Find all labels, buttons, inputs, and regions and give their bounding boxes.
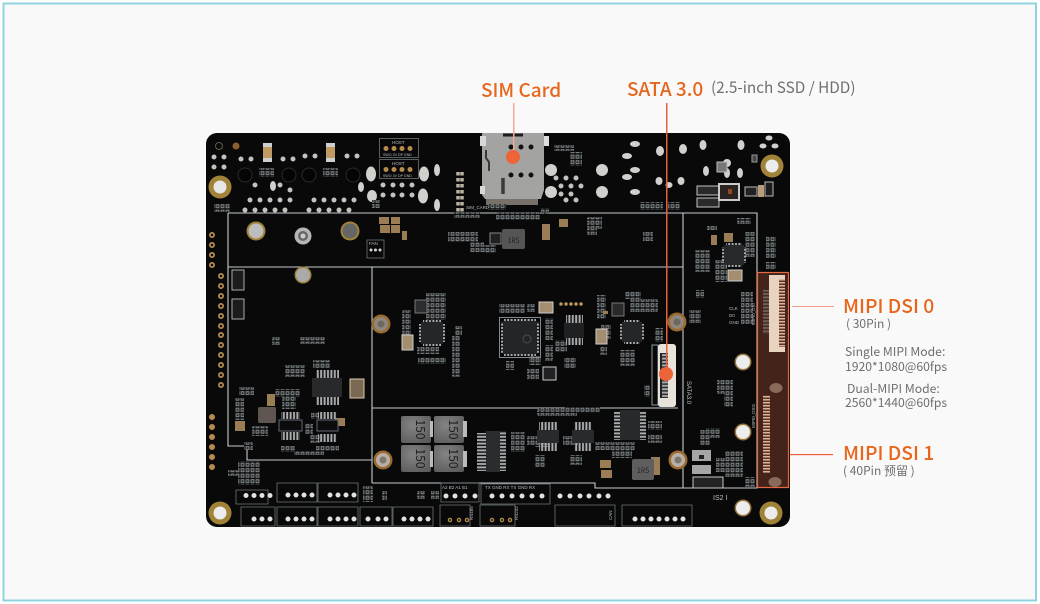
inductors: 150	[412, 449, 429, 469]
gold edge pads	[212, 235, 221, 467]
callout: SATA 3.0	[627, 75, 856, 381]
SIM card slot	[480, 133, 549, 205]
bottom header labels: A2 B2 A1 B1	[442, 485, 468, 490]
panel: circuit board: GND	[729, 320, 740, 325]
diodes	[232, 270, 244, 290]
panel: circuit board: MIPI0_DSI1	[751, 403, 756, 428]
text block: display modes: Dual-MIPI Mode:	[847, 379, 940, 397]
callout: SIM Card	[481, 76, 561, 164]
silkscreen outlines	[228, 213, 757, 488]
panel: circuit board: MIPI0_DSI	[751, 303, 756, 325]
panel: circuit board: IS2 I	[713, 495, 727, 502]
callout: MIPI DSI 0: ( 30Pin )	[846, 315, 891, 332]
FAN label: FAN	[369, 241, 378, 246]
inductors: 1R5	[637, 466, 649, 476]
QFN right	[622, 322, 642, 342]
inductors: 150	[445, 420, 462, 440]
MIPI connector 1	[763, 383, 782, 487]
SOP 8	[564, 323, 584, 338]
inductors: 150	[412, 420, 429, 440]
crystals	[402, 335, 413, 350]
silkscreen signal labels: SATA3.0	[685, 381, 691, 405]
silver through-hole pads	[214, 156, 581, 210]
callout: MIPI DSI 0	[792, 291, 934, 332]
cream SMD parts	[235, 217, 733, 478]
bottom header labels: CAN	[608, 510, 613, 520]
small square chips	[415, 300, 427, 313]
left mini chips	[279, 420, 302, 431]
TQFP right-top	[724, 245, 744, 265]
HOST connector boxes: SWO 3V DP GND	[383, 174, 412, 178]
TSSOP right	[620, 410, 640, 440]
text block: display modes: Single MIPI Mode:	[845, 342, 945, 360]
bottom header labels	[236, 483, 692, 526]
copper pad	[232, 142, 240, 150]
panel: circuit board: CLK	[729, 306, 738, 311]
text block: display modes: 2560*1440@60fps	[845, 393, 947, 411]
SIM label: SIM_CARD	[466, 205, 490, 210]
board body	[206, 133, 790, 527]
HOST connector boxes: HOST	[392, 140, 405, 145]
panel: circuit board: D0	[729, 313, 735, 318]
inductors: 150	[445, 449, 462, 469]
callout: MIPI DSI 1	[790, 438, 934, 479]
SATA FPC connector	[652, 344, 676, 407]
power stage chips	[537, 430, 559, 443]
callout: MIPI DSI 1: ( 40Pin 预留 )	[843, 462, 915, 479]
text block: display modes	[845, 342, 947, 411]
panel: circuit board	[206, 133, 790, 527]
SMD component clusters	[214, 145, 776, 502]
bottom header labels: TX GND RX TX GND RX	[485, 485, 535, 490]
HOST connector boxes	[380, 138, 418, 178]
black connector screws	[238, 168, 360, 182]
MIPI highlighted zone	[758, 272, 788, 488]
cream capacitors	[263, 143, 335, 162]
gold dots strip	[561, 302, 581, 306]
bottom header labels: RS232	[514, 506, 519, 520]
mounting holes	[208, 154, 784, 524]
bottom header labels: RS485	[469, 506, 474, 520]
HOST connector boxes: HOST	[392, 161, 405, 166]
HOST connector boxes: SWO 3V DP GND	[383, 153, 412, 157]
SOIC left	[312, 378, 342, 397]
ICs and chips	[232, 155, 773, 488]
silver oval pads	[270, 136, 778, 211]
inductors	[258, 229, 654, 480]
SMA diodes top right	[697, 186, 719, 195]
callout: MIPI DSI 1: MIPI DSI 1	[843, 438, 934, 466]
text block: display modes: 1920*1080@60fps	[845, 357, 947, 375]
inductors: 1R5	[507, 236, 520, 246]
pad column near SIM	[458, 172, 462, 216]
callout: MIPI DSI 0: MIPI DSI 0	[843, 291, 934, 319]
main SoC	[500, 318, 540, 358]
callout: SATA 3.0: SATA 3.0	[627, 75, 703, 102]
callout: SIM Card: SIM Card	[481, 76, 561, 103]
MIPI connector 0	[763, 275, 785, 352]
white header pads	[246, 495, 683, 519]
TSSOP centre	[486, 431, 500, 472]
QFN left	[421, 322, 443, 344]
FAN label	[367, 240, 384, 258]
callout: SATA 3.0: (2.5-inch SSD / HDD)	[711, 76, 856, 98]
